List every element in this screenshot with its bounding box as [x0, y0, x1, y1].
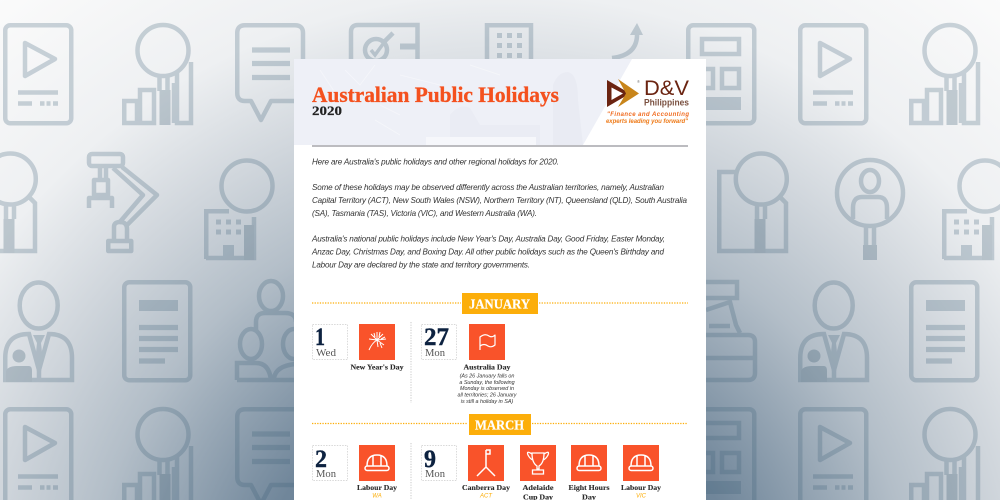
holiday: Canberra Day ACT: [462, 445, 510, 500]
title: 2020: [312, 104, 342, 118]
icon: play document bottom left: [5, 409, 71, 500]
icon: newspaper bottom: [688, 409, 754, 500]
holiday: Labour Day VIC: Labour Day: [621, 483, 661, 492]
holiday: Adelaide Cup Day: Adelaide: [522, 483, 554, 492]
holiday: New Year's Day: [350, 324, 404, 371]
date: 2 Mon: 2: [315, 446, 327, 473]
logo: D&V Philippines: experts leading you forward": [606, 119, 688, 125]
heading: March: MARCH: [475, 418, 524, 434]
icon: magnifier document left: [0, 154, 36, 253]
holiday note: is still a holiday in SA): [461, 399, 513, 405]
intro text: (SA), Tasmania (TAS), Victoria (VIC), and Western Australia (WA).: [312, 209, 537, 218]
holiday: New Year's Day: New Year's Day: [350, 362, 404, 371]
intro text: Capital Territory (ACT), New South Wales (NSW), Northern Territory (NT), Queensland (QLD), South Australia: [312, 196, 687, 205]
holiday: Eight Hours Day: [568, 445, 610, 500]
holiday: Australia Day: [457, 324, 517, 405]
panel: infographic sheet: [294, 59, 706, 500]
date: 1 Wed: Wed: [316, 347, 336, 359]
date: 9 Mon: Mon: [425, 468, 445, 480]
holiday note: all territories; 26 January: [457, 392, 517, 398]
holiday: Labour Day WA: WA: [372, 494, 382, 500]
date: 27 Mon: Mon: [425, 347, 445, 359]
icon: play document top left: [5, 25, 71, 123]
icon: checked document: [351, 25, 418, 61]
intro text: [311, 157, 687, 269]
icon: flag: [480, 335, 495, 350]
icon: office block: [487, 25, 531, 60]
holiday note: a Sunday, the following: [459, 380, 515, 386]
icon: magnifier chart top: [124, 25, 191, 125]
holiday: Labour Day VIC: [621, 445, 661, 500]
icon: suited person left: [5, 282, 72, 382]
icon: magnifier chart bottom: [124, 409, 191, 500]
icon: stamp right: [706, 282, 755, 380]
icon: magnifier person: [837, 160, 903, 260]
intro text: Some of these holidays may be observed differently across the Australian territories, namely, Australian: [312, 183, 664, 192]
logo: D&V Philippines: [606, 77, 689, 125]
icon: trophy: [528, 452, 548, 474]
intro text: Australia's national public holidays include New Year's Day, Australia Day, Good Friday, Easter Monday,: [311, 235, 665, 244]
logo: D&V Philippines: "Finance and Accounting: [607, 112, 689, 118]
date: 9 Mon: [422, 446, 456, 480]
icon: group of people: [237, 281, 305, 380]
icon: magnifier document right: [719, 154, 787, 253]
holiday note: Monday is observed in: [460, 386, 514, 392]
holiday: Eight Hours Day: Eight Hours: [568, 483, 610, 492]
holiday: Labour Day WA: [357, 445, 397, 500]
date: 2 Mon: Mon: [316, 468, 336, 480]
header background image: [294, 59, 632, 145]
date: 1 Wed: 1: [315, 324, 325, 351]
holiday: Labour Day WA: Labour Day: [357, 483, 397, 492]
holiday: Canberra Day ACT: ACT: [479, 494, 493, 500]
icon: text document right: [911, 282, 977, 380]
icon: suited person right: [800, 282, 867, 382]
holiday: Australia Day: Australia Day: [464, 362, 511, 371]
holiday: Labour Day VIC: VIC: [636, 494, 647, 500]
icon: speech bubble top: [237, 25, 303, 120]
icon: newspaper top: [688, 25, 754, 123]
icon: magnifier chart top right: [911, 25, 978, 125]
holiday note: (As 26 January falls on: [460, 374, 514, 380]
icon: play document top right: [800, 25, 866, 123]
icon: Canberra monument: [477, 450, 495, 476]
icon: play document bottom right: [800, 409, 866, 500]
logo: D&V Philippines: Philippines: [644, 98, 689, 108]
intro text: Labour Day are declared by the state and territory governments.: [312, 260, 530, 269]
heading: January: JANUARY: [469, 298, 530, 312]
holiday: Adelaide Cup Day: [520, 445, 556, 500]
date: 27 Mon: 27: [424, 324, 449, 351]
date: 2 Mon: [312, 446, 348, 480]
holiday note: [457, 374, 517, 405]
date: 1 Wed: [312, 324, 348, 360]
intro text: Here are Australia's public holidays and other regional holidays for 2020.: [312, 157, 559, 166]
icon: firework: [369, 332, 386, 350]
logo: D&V Philippines: D&V: [644, 77, 689, 100]
icon: magnifier building right: [944, 160, 1000, 260]
heading: January: [312, 293, 688, 314]
title: Australian Public Holidays: [312, 82, 559, 107]
date: 27 Mon: [422, 324, 456, 360]
intro text: Anzac Day, Christmas Day, and Boxing Day. All other public holidays such as the Queen's Birthday and: [311, 248, 664, 256]
logo: D&V Philippines: ®: [637, 79, 640, 84]
icon: text document left: [124, 282, 190, 380]
icon: magnifier building left: [206, 160, 272, 260]
icon: rising arrow: [612, 23, 643, 58]
icon: speech bubble bottom: [237, 409, 303, 500]
icon: magnifier chart bottom right: [911, 409, 978, 500]
heading: March: [312, 414, 688, 435]
title: [312, 82, 559, 118]
date: 9 Mon: 9: [424, 446, 436, 473]
icon: robot arm: [89, 154, 157, 251]
holiday: Canberra Day ACT: Canberra Day: [462, 483, 510, 492]
